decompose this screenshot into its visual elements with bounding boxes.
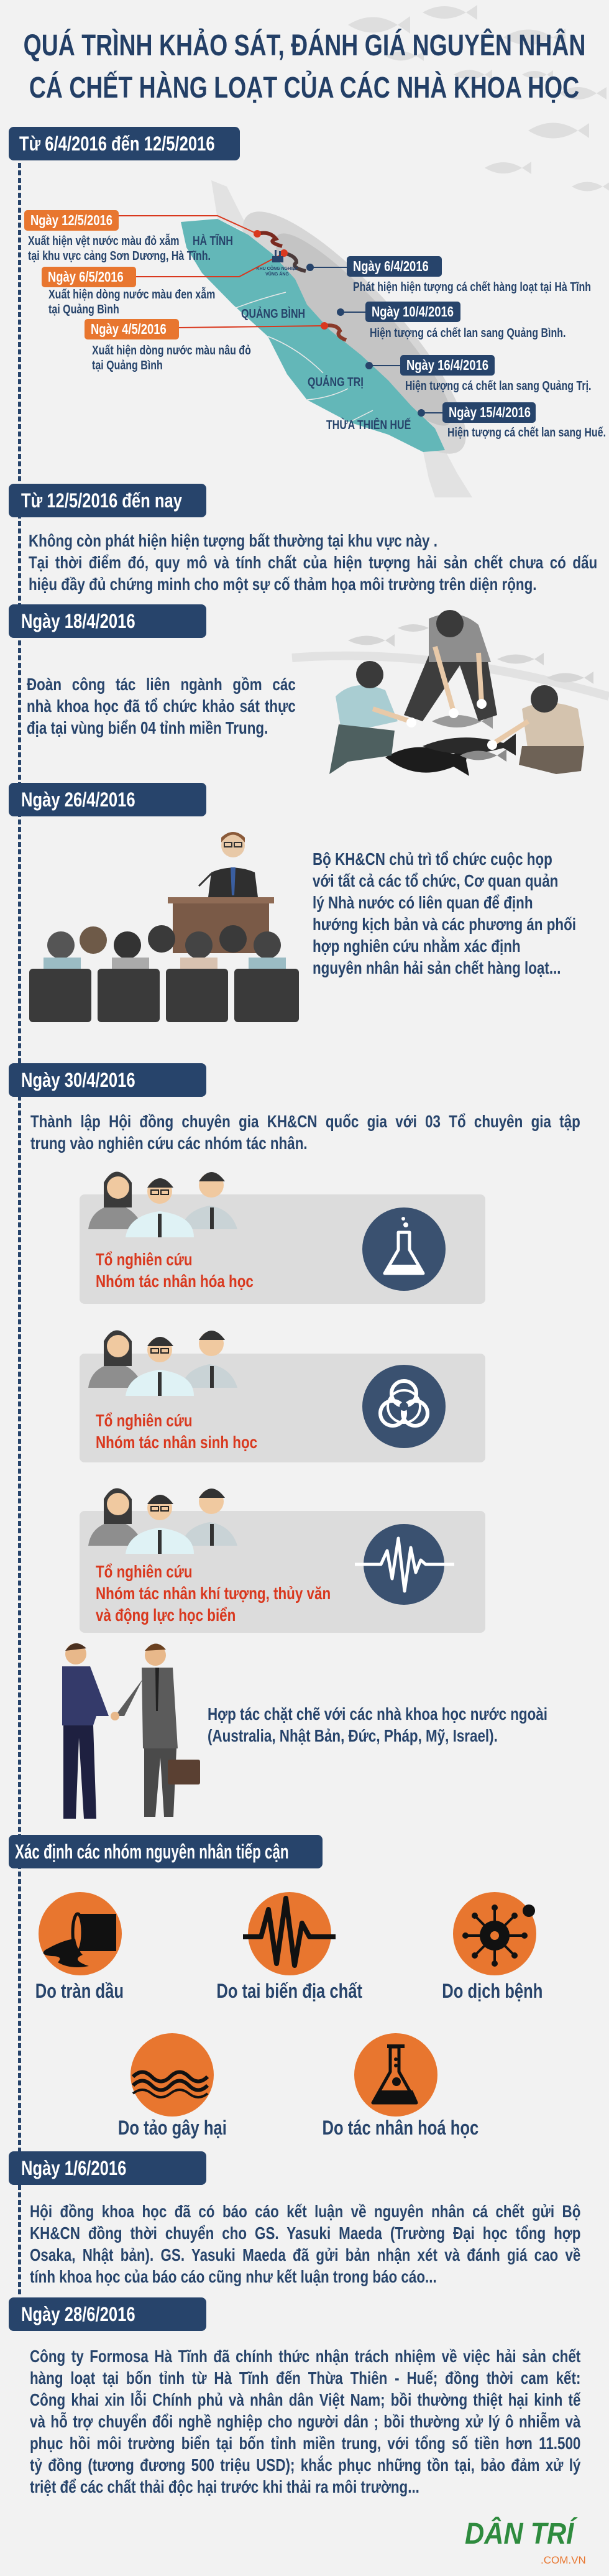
panel: hydro-meteorological group: Tổ nghiên cứu: [96, 1562, 193, 1581]
text: 18/4: nhà khoa học đã tổ chức khảo sát thực: [27, 696, 296, 716]
text: 28/6: Công khai xin lỗi Chính phủ và nhân dân Việt Nam; bồi thường thiệt hại kinh tế: [30, 2390, 580, 2409]
factory icon: [272, 250, 283, 262]
map callout 15/4: Hiện tượng cá chết lan sang Huế.: [447, 426, 606, 440]
label: harmful algae: Do tảo gây hại: [118, 2117, 226, 2139]
header: 12/5 to now: Từ 12/5/2016 đến nay: [21, 489, 182, 512]
text: 26/4: nguyên nhân hải sản chết hàng loạt...: [313, 958, 561, 977]
icon: geological hazard: [243, 1892, 336, 1975]
panel: biological group: [80, 1331, 485, 1462]
header: 28/6: Ngày 28/6/2016: [21, 2303, 135, 2325]
map callout 15/4: Ngày 15/4/2016: [449, 404, 531, 420]
map callout 10/4: [365, 302, 566, 340]
icon: biohazard: [362, 1365, 446, 1448]
title: QUÁ TRÌNH KHẢO SÁT, ĐÁNH GIÁ NGUYÊN NHÂN: [24, 29, 585, 62]
illustration: scientists examining dead fish: [292, 610, 609, 776]
text: 30/4: Thành lập Hội đồng chuyên gia KH&CN quốc gia với 03 Tổ chuyên gia tập: [30, 1112, 580, 1131]
text: 1/6: [30, 2202, 580, 2286]
map callout 6/5: [42, 267, 215, 316]
text: international cooperation: Hợp tác chặt chẽ với các nhà khoa học nước ngoài: [208, 1704, 547, 1724]
header: 30/4: Ngày 30/4/2016: [21, 1069, 135, 1091]
map callout 4/5: Ngày 4/5/2016: [91, 321, 167, 337]
text: 30/4: trung vào nghiên cứu các nhóm tác nhân.: [30, 1133, 308, 1153]
map: [119, 180, 472, 497]
text: 26/4: hướng kịch bản và các phương án phối: [313, 915, 576, 934]
text: since 12/5: [29, 531, 597, 594]
text: 26/4: lý Nhà nước có liên quan để định: [313, 893, 533, 912]
header: 1/6: Ngày 1/6/2016: [21, 2157, 126, 2179]
icon: oil spill: [39, 1892, 122, 1975]
map callout 10/4: Ngày 10/4/2016: [372, 303, 454, 320]
map callout 16/4: Ngày 16/4/2016: [406, 357, 488, 373]
map callout 10/4: Hiện tượng cá chết lan sang Quảng Bình.: [370, 326, 566, 340]
text: 26/4: với tất cả các tổ chức, Cơ quan quản: [313, 871, 558, 890]
panel: hydro-meteorological group: và động lực học biển: [96, 1605, 236, 1625]
icon: harmful algae: [130, 2033, 214, 2117]
logo: Dan Tri: DÂN TRÍ: [465, 2518, 574, 2551]
panel: chemical group: [80, 1171, 485, 1304]
header: 26/4: Ngày 26/4/2016: [21, 788, 135, 811]
left person: [336, 685, 398, 734]
panel: hydro-meteorological group: [80, 1489, 485, 1633]
panel: hydro-meteorological group: Nhóm tác nhân khí tượng, thủy văn: [96, 1584, 331, 1603]
header: 6/4 to 12/5: [9, 127, 240, 160]
text: QUẢNG BÌNH: [241, 307, 305, 321]
map callout 6/4: [347, 256, 591, 294]
panel: chemical group: Tổ nghiên cứu: [96, 1250, 193, 1269]
icon: flask: [362, 1207, 446, 1291]
text: 1/6: Hội đồng khoa học đã có báo cáo kết luận về nguyên nhân cá chết gửi Bộ: [30, 2202, 580, 2221]
label: geological hazard: Do tai biến địa chất: [217, 1980, 362, 2002]
text: 28/6: Công ty Formosa Hà Tĩnh đã chính thức nhận trách nhiệm về việc hải sản chết: [30, 2347, 580, 2366]
icon: team: [88, 1171, 237, 1237]
map callout 12/5: [24, 210, 211, 263]
header: cause groups: [9, 1835, 323, 1868]
logo: Dan Tri: .COM.VN: [541, 2554, 586, 2566]
map callout 16/4: Hiện tượng cá chết lan sang Quảng Trị.: [405, 379, 591, 393]
title: CÁ CHẾT HÀNG LOẠT CỦA CÁC NHÀ KHOA HỌC: [29, 72, 580, 104]
text: since 12/5: hiệu đầy đủ chứng minh cho một sự cố thảm họa môi trường trên diện rộng.: [29, 575, 537, 594]
text: 26/4: hợp nghiên cứu nhằm xác định: [313, 936, 521, 956]
map callout 4/5: [85, 319, 251, 372]
map callout 15/4: [442, 402, 606, 440]
text: 30/4: [30, 1112, 580, 1153]
map callout 12/5: Ngày 12/5/2016: [30, 212, 112, 228]
provinces: [181, 219, 445, 452]
illustration: meeting podium: [29, 832, 299, 1022]
icon: team: [88, 1331, 237, 1396]
text: 26/4: [313, 849, 576, 977]
map callout 6/4: Phát hiện hiện tượng cá chết hàng loạt tại Hà Tĩnh: [353, 280, 591, 294]
header: 26/4: [9, 783, 206, 816]
title: [24, 29, 585, 104]
text: 1/6: Osaka, Nhật bản). GS. Yasuki Maeda đã gửi bản nhận xét và đánh giá cao về: [30, 2245, 580, 2264]
icon: epidemic: [453, 1892, 536, 1975]
label: chemical agent: Do tác nhân hoá học: [322, 2117, 478, 2139]
text: 28/6: triệt để các chất thải độc hại trước khi thải ra môi trường...: [30, 2477, 419, 2496]
header: 28/6: [9, 2297, 206, 2331]
text: 18/4: [27, 675, 296, 737]
text: since 12/5: Không còn phát hiện hiện tượng bất thường tại khu vực này .: [29, 531, 437, 550]
text: 28/6: hàng loạt tại bốn tỉnh từ Hà Tĩnh đến Thừa Thiên - Huế; đồng thời cam kết:: [30, 2368, 580, 2388]
map callout 6/5: tại Quảng Bình: [48, 303, 119, 316]
text: THỪA THIÊN HUẾ: [326, 418, 411, 432]
leader lines: [119, 216, 257, 234]
panel: biological group: Nhóm tác nhân sinh học: [96, 1433, 257, 1452]
fish: [385, 714, 516, 776]
header: 12/5 to now: [9, 484, 206, 517]
text: international cooperation: [208, 1704, 547, 1745]
map callout 12/5: tại khu vực cảng Sơn Dương, Hà Tĩnh.: [28, 249, 211, 263]
text: 18/4: Đoàn công tác liên ngành gồm các: [27, 675, 296, 694]
logo: Dan Tri: [465, 2517, 586, 2566]
illustration: handshake: [62, 1643, 200, 1819]
text: since 12/5: Tại thời điểm đó, quy mô và tính chất của hiện tượng hải sản chết chưa có dấu: [29, 553, 597, 572]
map callout 6/5: Xuất hiện dòng nước màu đen xẫm: [48, 288, 215, 302]
background fish pattern: [348, 5, 609, 192]
text: 28/6: phục hồi môi trường biển tại bốn tỉnh miền trung, với tổng số tiền hơn 11.500: [30, 2434, 580, 2453]
icon: chemical agent: [354, 2033, 437, 2117]
map callout 12/5: Xuất hiện vệt nước màu đỏ xẫm: [28, 234, 179, 248]
map: VŨNG ÁNG: [265, 271, 289, 277]
header: 30/4: [9, 1063, 206, 1097]
timeline dotted line: [18, 163, 21, 2297]
header: 18/4: [9, 604, 206, 638]
label: oil spill: Do tràn dầu: [35, 1980, 124, 2002]
header: 18/4: Ngày 18/4/2016: [21, 610, 135, 632]
map callout 4/5: Xuất hiện dòng nước màu nâu đỏ: [92, 344, 251, 358]
text: 1/6: KH&CN đồng thời chuyển cho GS. Yasuki Maeda (Trường Đại học tổng hợp: [30, 2223, 580, 2243]
map: KHU CÔNG NGHIỆP: [257, 265, 298, 271]
header: 6/4 to 12/5: Từ 6/4/2016 đến 12/5/2016: [19, 132, 215, 155]
text: 1/6: tính khoa học của báo cáo cũng như kết luận trong báo cáo...: [30, 2267, 437, 2286]
text: 26/4: Bộ KH&CN chủ trì tổ chức cuộc họp: [313, 849, 552, 869]
dots: [254, 230, 261, 238]
text: 28/6: [30, 2347, 580, 2496]
icon: seismic wave: [355, 1524, 454, 1605]
icon: team: [88, 1489, 237, 1554]
panel: biological group: Tổ nghiên cứu: [96, 1411, 193, 1430]
label: epidemic: Do dịch bệnh: [442, 1980, 543, 2002]
center person: [404, 640, 497, 721]
pollution streaks: [257, 233, 282, 246]
map callout 6/5: Ngày 6/5/2016: [48, 269, 124, 285]
map callout 6/4: Ngày 6/4/2016: [353, 258, 429, 274]
affected sea area: [214, 185, 494, 480]
map province labels: HÀ TĨNH: [193, 234, 233, 248]
right person: [522, 703, 584, 752]
header: cause groups: Xác định các nhóm nguyên nhân tiếp cận: [15, 1840, 289, 1863]
text: 18/4: địa tại vùng biển 04 tỉnh miền Trung.: [27, 718, 268, 737]
panel: chemical group: Nhóm tác nhân hóa học: [96, 1272, 254, 1291]
land gray: [211, 180, 252, 235]
header: 1/6: [9, 2151, 206, 2185]
map callout 16/4: [400, 355, 591, 393]
text: 28/6: và hỗ trợ chuyển đổi nghề nghiệp cho người dân ; bồi thường xử lý ô nhiễm và: [30, 2412, 580, 2431]
text: QUẢNG TRỊ: [308, 376, 364, 389]
text: international cooperation: (Australia, Nhật Bản, Đức, Pháp, Mỹ, Israel).: [208, 1726, 498, 1745]
text: 28/6: tỷ đồng (tương đương 500 triệu USD); khắc phục những tồn tại, bảo đảm xử lý: [30, 2455, 580, 2475]
map callout 4/5: tại Quảng Bình: [92, 359, 163, 372]
